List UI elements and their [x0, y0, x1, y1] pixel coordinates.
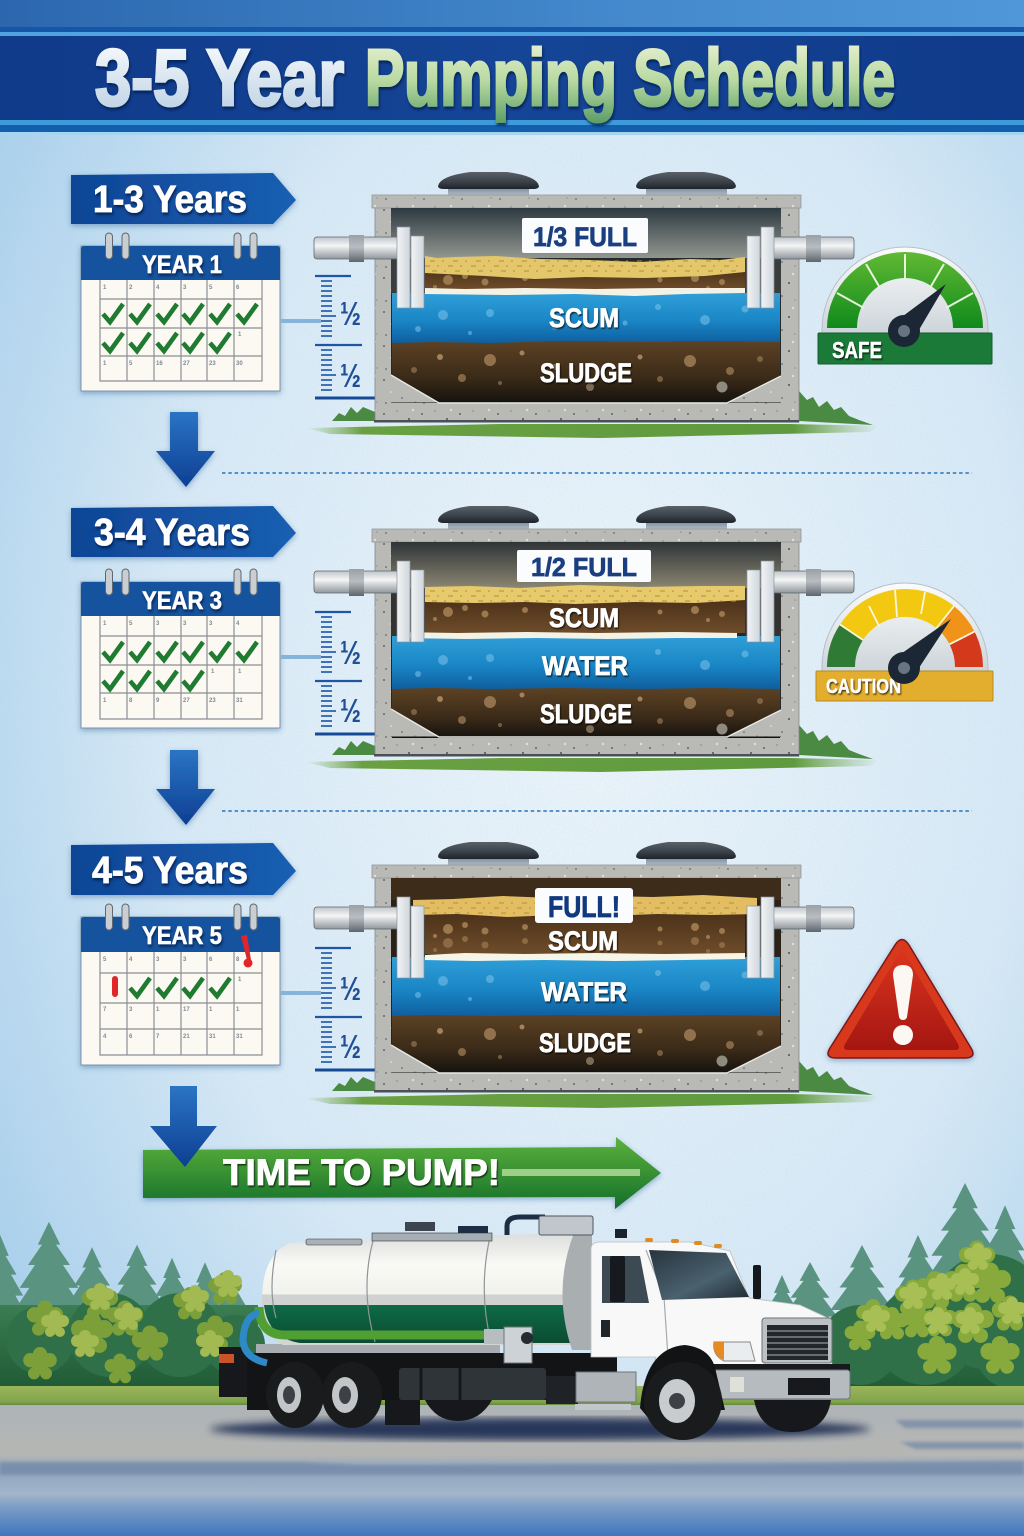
- level label: FULL!: [548, 891, 620, 924]
- stage 3 heading ribbon: [71, 843, 296, 895]
- layer labels: [540, 303, 632, 388]
- water: [392, 957, 780, 1016]
- pipes and baffles: [314, 897, 854, 978]
- treeline left: [0, 1222, 265, 1390]
- brown layer: [425, 910, 745, 954]
- calendar: year 5: 17: [183, 1007, 190, 1013]
- ruler 1: [281, 276, 375, 398]
- calendar: year 1: [81, 233, 280, 391]
- calendar: year 3: 3: [183, 621, 187, 627]
- layer labels: SCUM: [548, 926, 618, 956]
- calendar: year 3: 27: [183, 698, 190, 704]
- front wheel arch: [640, 1345, 725, 1420]
- stage 1 heading ribbon: 1-3 Years: [93, 179, 247, 221]
- gauge: safe: [818, 247, 992, 364]
- front wheel: [644, 1362, 722, 1440]
- layer labels: WATER: [541, 977, 627, 1007]
- time to pump arrow: [143, 1137, 661, 1209]
- ruler 3: [281, 948, 375, 1070]
- level label: 1/3 FULL: [533, 222, 637, 252]
- calendar: year 3: [81, 569, 280, 728]
- exclamation mark: [893, 965, 913, 1045]
- layer labels: SLUDGE: [539, 1028, 631, 1058]
- brown layer: [425, 598, 745, 633]
- tank 2: 1/2 full: [305, 506, 880, 772]
- calendar: year 3: 1: [103, 698, 107, 704]
- calendar: year 1: 1: [103, 285, 107, 291]
- calendar: year 1: 16: [156, 361, 163, 367]
- layer labels: SCUM: [549, 603, 619, 633]
- divider lines: [222, 473, 972, 811]
- calendar: year 3: YEAR 3: [142, 587, 222, 615]
- level label: 1/2 FULL: [531, 552, 637, 582]
- calendar: year 5: 4: [103, 1034, 107, 1040]
- calendar: year 5: 6: [129, 1034, 133, 1040]
- clearance lights: [645, 1238, 722, 1248]
- pipes and baffles: [314, 227, 854, 308]
- pavement: [0, 1405, 1024, 1536]
- calendar: year 5: 4: [129, 957, 133, 963]
- layer labels: [539, 926, 631, 1058]
- vacuum tank: [262, 1233, 592, 1345]
- calendar: year 1: 1: [103, 361, 107, 367]
- ruler 2: ½: [340, 634, 361, 671]
- red marks: [112, 935, 252, 997]
- tank 3: full: [305, 842, 880, 1108]
- cab: [591, 1242, 832, 1365]
- stage 3 heading ribbon: 4-5 Years: [92, 850, 248, 892]
- calendar: year 3: 8: [129, 698, 133, 704]
- grille: [762, 1318, 832, 1363]
- calendar: year 1: 3: [183, 285, 187, 291]
- treeline right: [756, 1183, 1024, 1390]
- needle: [888, 284, 946, 347]
- calendar: year 5: 3: [129, 1007, 133, 1013]
- ruler 1: ½: [340, 357, 361, 394]
- calendar: year 5: 7: [156, 1034, 160, 1040]
- gauge: caution: [816, 583, 993, 701]
- calendar: year 3: 4: [236, 621, 240, 627]
- title banner: [0, 0, 1024, 135]
- calendar: year 5: 3: [183, 957, 187, 963]
- calendar: year 3: 9: [156, 698, 160, 704]
- checkmarks: [103, 642, 257, 689]
- arrow down 2: [156, 750, 215, 825]
- calendar: year 5: 31: [236, 1034, 243, 1040]
- calendar: year 5: 5: [103, 957, 107, 963]
- warning triangle: [828, 940, 973, 1058]
- pipes and baffles: [314, 561, 854, 642]
- calendar: year 1: 27: [183, 361, 190, 367]
- checkmarks: [130, 978, 230, 996]
- stage 2 heading ribbon: 3-4 Years: [94, 512, 250, 554]
- calendar: year 1: 23: [209, 361, 216, 367]
- yellow crust: [425, 585, 745, 604]
- chassis: [219, 1344, 636, 1410]
- layer labels: WATER: [542, 651, 628, 681]
- stage 1 heading ribbon: [71, 173, 296, 224]
- far front wheel: [754, 1400, 831, 1432]
- calendar: year 3: 31: [236, 698, 243, 704]
- calendar: year 5: 31: [209, 1034, 216, 1040]
- calendar: year 3: 1: [211, 669, 215, 675]
- calendar: year 1: 6: [236, 285, 240, 291]
- calendar: year 1: 30: [236, 361, 243, 367]
- calendar: year 3: 3: [209, 621, 213, 627]
- layer labels: SLUDGE: [540, 358, 632, 388]
- pump: [484, 1327, 533, 1363]
- yellow crust: [425, 256, 745, 279]
- water: [392, 293, 780, 343]
- green hose: [259, 1307, 486, 1335]
- calendar: year 5: 8: [236, 957, 240, 963]
- time to pump arrow: TIME TO PUMP!: [223, 1152, 500, 1193]
- title text: [95, 33, 895, 122]
- stage 2 heading ribbon: [71, 506, 296, 557]
- ruler 3: ½: [340, 1028, 361, 1065]
- ruler 2: ½: [340, 692, 361, 729]
- layer labels: SLUDGE: [540, 699, 632, 729]
- gauge: caution: CAUTION: [826, 676, 901, 698]
- grass strip: [0, 1386, 1024, 1406]
- calendar: year 3: 1: [238, 669, 242, 675]
- ruler 3: ½: [340, 970, 361, 1007]
- calendar: year 5: 21: [183, 1034, 190, 1040]
- calendar: year 3: 3: [156, 621, 160, 627]
- ruler 2: [281, 612, 375, 734]
- calendar: year 3: 23: [209, 698, 216, 704]
- calendar: year 1: 2: [129, 285, 133, 291]
- layer labels: SCUM: [549, 303, 619, 333]
- calendar: year 1: YEAR 1: [142, 251, 222, 279]
- water: [392, 636, 780, 689]
- calendar: year 1: 5: [209, 285, 213, 291]
- calendar: year 5: 1: [156, 1007, 160, 1013]
- brown layer: [425, 268, 745, 289]
- bumper: [700, 1364, 850, 1399]
- calendar: year 5: YEAR 5: [142, 922, 222, 950]
- septic pump truck: [219, 1216, 850, 1440]
- checkmarks: [103, 304, 257, 351]
- calendar: year 5: 6: [209, 957, 213, 963]
- gauge: safe: SAFE: [832, 337, 882, 363]
- calendar: year 3: 1: [103, 621, 107, 627]
- arrow down 3: [150, 1086, 217, 1167]
- rear wheels: [266, 1362, 492, 1428]
- ruler 1: ½: [340, 295, 361, 332]
- sludge: [392, 341, 780, 403]
- title text: 3-5 Year: [95, 33, 344, 122]
- calendar: year 1: 1: [238, 332, 242, 338]
- sludge: [392, 688, 780, 738]
- calendar: year 1: 5: [129, 361, 133, 367]
- arrow down 1: [156, 412, 215, 487]
- headlight: [714, 1342, 755, 1361]
- needle: [888, 619, 951, 684]
- calendar: year 5: [81, 904, 280, 1065]
- calendar: year 5: 1: [236, 1007, 240, 1013]
- calendar: year 5: 7: [103, 1007, 107, 1013]
- calendar: year 3: 5: [129, 621, 133, 627]
- cab windows: [601, 1250, 761, 1337]
- calendar: year 5: 1: [238, 977, 242, 983]
- calendar: year 1: 4: [156, 285, 160, 291]
- tank hatches: [306, 1216, 627, 1245]
- blue hose: [243, 1313, 267, 1363]
- layer labels: [540, 603, 632, 729]
- yellow crust: [413, 895, 757, 917]
- calendar: year 5: 1: [209, 1007, 213, 1013]
- calendar: year 5: 3: [156, 957, 160, 963]
- sludge: [392, 1015, 780, 1073]
- tank 1: 1/3 full: [305, 172, 880, 438]
